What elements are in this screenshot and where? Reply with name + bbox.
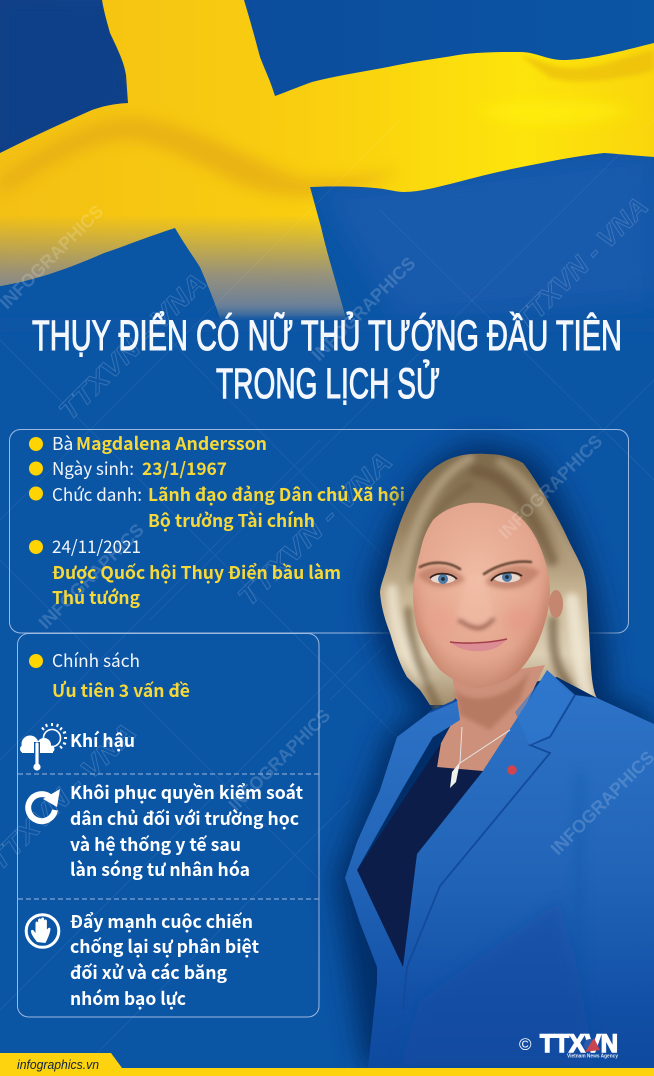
jacket lapels — [403, 695, 575, 1010]
footer tab — [0, 1053, 122, 1072]
panel: profile — [10, 430, 628, 633]
neck shadow — [455, 670, 530, 730]
watermarks: INFOGRAPHICS — [225, 705, 334, 815]
text: policy heading — [52, 648, 190, 703]
text: election — [52, 534, 341, 610]
necklace — [450, 727, 510, 788]
TTXVN logo: © — [519, 1035, 532, 1054]
text: name: Bà — [52, 431, 73, 456]
hair — [370, 450, 605, 712]
nose — [457, 575, 494, 628]
icon: stop hand — [26, 915, 59, 947]
watermarks: TTXVN - VNA — [53, 267, 212, 426]
text: titles: Lãnh đạo đảng Dân chủ Xã hội — [148, 482, 405, 507]
text: fight discrimination: Đẩy mạnh cuộc chiến — [70, 909, 253, 934]
portrait shadow — [334, 442, 654, 1068]
TTXVN logo: Vietnam News Agency — [567, 1054, 618, 1060]
text: fight discrimination: đối xử và các băng — [70, 960, 228, 985]
title: TRONG LỊCH SỬ — [216, 359, 440, 408]
text: birth date — [52, 456, 227, 481]
left eye — [430, 574, 457, 584]
text: restore democratic control: Khôi phục quyền kiểm soát — [70, 780, 304, 805]
footer tab: infographics.vn — [17, 1057, 99, 1072]
bullet: name — [29, 437, 43, 451]
icon: refresh arrow — [28, 789, 60, 821]
text: name: Magdalena Andersson — [76, 431, 267, 456]
footer strip — [0, 1068, 654, 1076]
title — [32, 311, 622, 408]
watermarks: TTXVN - VNA — [232, 446, 398, 612]
ear — [549, 590, 563, 618]
bullet: titles — [29, 486, 43, 500]
TTXVN logo: TTXVN — [540, 1030, 618, 1058]
text: policy heading: Ưu tiên 3 vấn đề — [52, 678, 190, 703]
watermarks: INFOGRAPHICS — [308, 253, 419, 365]
text: climate: Khí hậu — [70, 728, 135, 753]
bullet: birth date — [29, 462, 43, 476]
text: election: Thủ tướng — [52, 585, 141, 610]
watermarks: TTXVN - VNA — [509, 191, 654, 336]
neck and chest — [437, 665, 545, 772]
text: titles — [52, 482, 405, 533]
flag of Sweden — [0, 0, 654, 332]
face — [413, 502, 550, 685]
text: titles: Chức danh: — [52, 482, 142, 507]
jacket — [345, 670, 654, 1068]
text: birth date: Ngày sinh: — [52, 456, 134, 481]
text: fight discrimination: nhóm bạo lực — [70, 986, 186, 1011]
watermark on jacket — [495, 431, 654, 859]
bullet: election date — [29, 540, 43, 554]
lapel pin — [507, 765, 517, 775]
lapel highlight — [515, 673, 572, 745]
text: election: Được Quốc hội Thụy Điển bầu làm — [52, 560, 341, 585]
icon: climate — [20, 723, 67, 771]
portrait — [334, 442, 654, 1068]
text: restore democratic control: và hệ thống y tế sau — [70, 832, 241, 857]
watermarks: INFOGRAPHICS — [35, 520, 148, 633]
text: fight discrimination: chống lại sự phân biệt — [70, 934, 260, 959]
watermarks — [0, 191, 654, 876]
panel: policies — [18, 634, 319, 1017]
jacket fold shading — [400, 770, 592, 1066]
right eye — [491, 572, 522, 582]
text: titles: Bộ trưởng Tài chính — [148, 508, 315, 533]
watermark on jacket: INFOGRAPHICS — [495, 431, 606, 543]
bullet: policy — [29, 654, 43, 668]
text: birth date: 23/1/1967 — [142, 456, 227, 481]
blouse — [357, 743, 483, 967]
text: restore democratic control: dân chủ đối với trường học — [70, 806, 299, 831]
eyebrows — [420, 562, 531, 574]
text: fight discrimination — [70, 909, 260, 1011]
mouth — [450, 639, 507, 651]
text: policy heading: Chính sách — [52, 648, 140, 673]
text: restore democratic control: làn sóng tư nhân hóa — [70, 857, 250, 882]
text: election: 24/11/2021 — [52, 534, 141, 559]
text: restore democratic control — [70, 780, 304, 882]
